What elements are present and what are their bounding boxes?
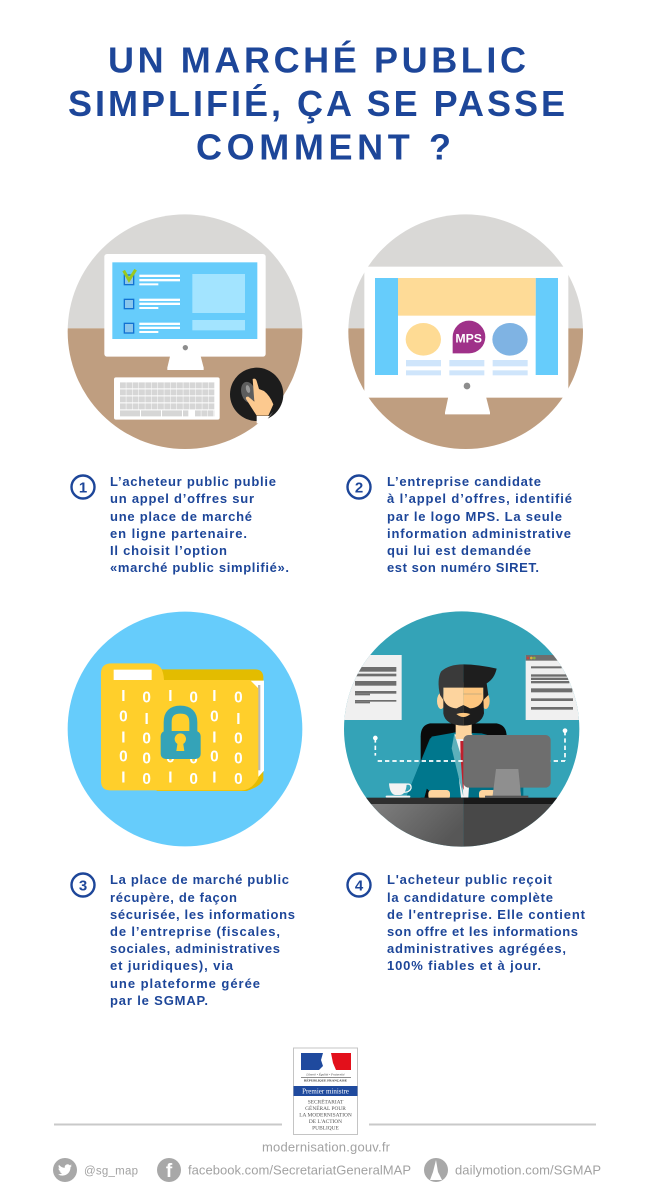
step 4 text: 100% fiables et à jour. <box>387 958 541 973</box>
logo: SGMAP République française: PUBLIQUE <box>312 1126 340 1132</box>
step 2 text: L’entreprise candidate <box>387 474 541 489</box>
step 4 number <box>348 874 370 896</box>
step 3 text: une plateforme gérée <box>110 976 260 991</box>
social: facebook: facebook.com/SecretariatGeneralMAP <box>188 1162 411 1178</box>
step 3 text: récupère, de façon <box>110 890 237 905</box>
step 3 text: par le SGMAP. <box>110 993 208 1008</box>
chair <box>421 723 507 798</box>
binary digits: 0 <box>142 751 151 768</box>
binary digits: I <box>121 688 125 705</box>
binary digits: 0 <box>119 749 128 766</box>
step 2 text: est son numéro SIRET. <box>387 560 539 575</box>
binary digits: 0 <box>142 771 151 788</box>
binary digits <box>119 688 243 788</box>
step 4 text: la candidature complète <box>387 890 553 905</box>
step 3 text: sociales, administratives <box>110 941 280 956</box>
step 2 text: qui lui est demandée <box>387 543 531 558</box>
binary digits: I <box>121 769 125 786</box>
binary digits: 0 <box>189 771 198 788</box>
title <box>68 40 565 167</box>
binary digits: 0 <box>234 690 243 707</box>
social: twitter: @sg_map <box>84 1166 138 1178</box>
binary digits: 0 <box>189 690 198 707</box>
step 3 text: de l’entreprise (fiscales, <box>110 924 280 939</box>
logo: SGMAP République française: RÉPUBLIQUE FRANÇAISE <box>304 1078 348 1082</box>
step 1 text <box>110 474 289 575</box>
social: facebook <box>157 1158 411 1182</box>
binary digits: 0 <box>210 708 219 725</box>
person <box>406 664 523 799</box>
logo: SGMAP République française: SECRÉTARIAT <box>308 1098 344 1106</box>
binary digits: 0 <box>142 690 151 707</box>
step 4 text: administratives agrégées, <box>387 941 566 956</box>
binary digits: I <box>145 711 149 728</box>
step 1 text: un appel d’offres sur <box>110 491 254 506</box>
binary digits: 0 <box>234 771 243 788</box>
step 3 number <box>72 874 94 896</box>
illustration: secured data folder <box>68 612 302 846</box>
logo: SGMAP République française: Premier ministre <box>302 1088 349 1096</box>
binary digits: 0 <box>234 751 243 768</box>
binary digits: I <box>212 769 216 786</box>
step 2 number: 2 <box>355 480 363 496</box>
social: dailymotion <box>424 1158 601 1182</box>
step 4 text: L'acheteur public reçoit <box>387 872 553 887</box>
step 1 text: «marché public simplifié». <box>110 560 289 575</box>
binary digits: I <box>168 688 172 705</box>
binary digits: 0 <box>142 731 151 748</box>
step 4 number: 4 <box>355 878 364 894</box>
logo: MPS badge: MPS <box>455 332 482 346</box>
social: twitter <box>53 1158 138 1182</box>
binary digits: I <box>121 729 125 746</box>
step 3 text: et juridiques), via <box>110 958 234 973</box>
step 1 number: 1 <box>79 480 87 496</box>
illustration: computer with checklist on a desk <box>68 214 302 449</box>
illustration: public buyer at his desk <box>335 611 585 855</box>
step 1 text: L’acheteur public publie <box>110 474 276 489</box>
illustration: monitor showing MPS logo <box>348 214 583 449</box>
binary digits: 0 <box>210 749 219 766</box>
step 1 text: en ligne partenaire. <box>110 526 247 541</box>
dashed connectors <box>375 731 565 761</box>
binary digits: I <box>212 688 216 705</box>
step 3 text: sécurisée, les informations <box>110 907 295 922</box>
binary digits: 0 <box>234 731 243 748</box>
website link: modernisation.gouv.fr <box>262 1140 391 1154</box>
binary digits: 0 <box>119 708 128 725</box>
step 4 text: de l'entreprise. Elle contient <box>387 907 586 922</box>
step 4 text <box>387 872 586 973</box>
logo: SGMAP République française <box>294 1048 358 1134</box>
document left <box>342 655 402 720</box>
logo: SGMAP République française: GÉNÉRAL POUR <box>305 1104 346 1112</box>
title: COMMENT ? <box>196 126 451 167</box>
desk <box>366 798 558 847</box>
logo: SGMAP République française: LA MODERNISATION <box>299 1113 352 1119</box>
step 3 number: 3 <box>79 878 87 894</box>
title: SIMPLIFIÉ, ÇA SE PASSE <box>68 83 565 124</box>
binary digits: 0 <box>189 751 198 768</box>
step 1 text: une place de marché <box>110 509 252 524</box>
step 2 text <box>387 474 572 575</box>
step 3 text: La place de marché public <box>110 872 289 887</box>
binary digits: I <box>212 729 216 746</box>
step 2 number <box>348 476 370 498</box>
logo: SGMAP République française: Liberté • Égalité • Fraternité <box>305 1072 345 1076</box>
social: facebook: f <box>166 1161 173 1182</box>
binary digits: 0 <box>166 749 175 766</box>
coffee cup <box>386 783 411 798</box>
step 1 text: Il choisit l’option <box>110 543 227 558</box>
step 2 text: par le logo MPS. La seule <box>387 509 562 524</box>
monitor back <box>463 735 551 798</box>
document right <box>526 655 582 720</box>
step 2 text: information administrative <box>387 526 571 541</box>
title: UN MARCHÉ PUBLIC <box>108 40 526 81</box>
social: dailymotion: dailymotion.com/SGMAP <box>455 1162 601 1178</box>
step 3 text <box>110 872 295 1008</box>
logo: SGMAP République française: DE L'ACTION <box>309 1119 342 1125</box>
binary digits: I <box>168 769 172 786</box>
logo: MPS badge <box>453 321 485 353</box>
step 4 text: son offre et les informations <box>387 924 578 939</box>
binary digits: I <box>236 711 240 728</box>
step 1 number <box>72 476 94 498</box>
step 2 text: à l’appel d’offres, identifié <box>387 491 572 506</box>
icon: padlock <box>161 710 201 759</box>
